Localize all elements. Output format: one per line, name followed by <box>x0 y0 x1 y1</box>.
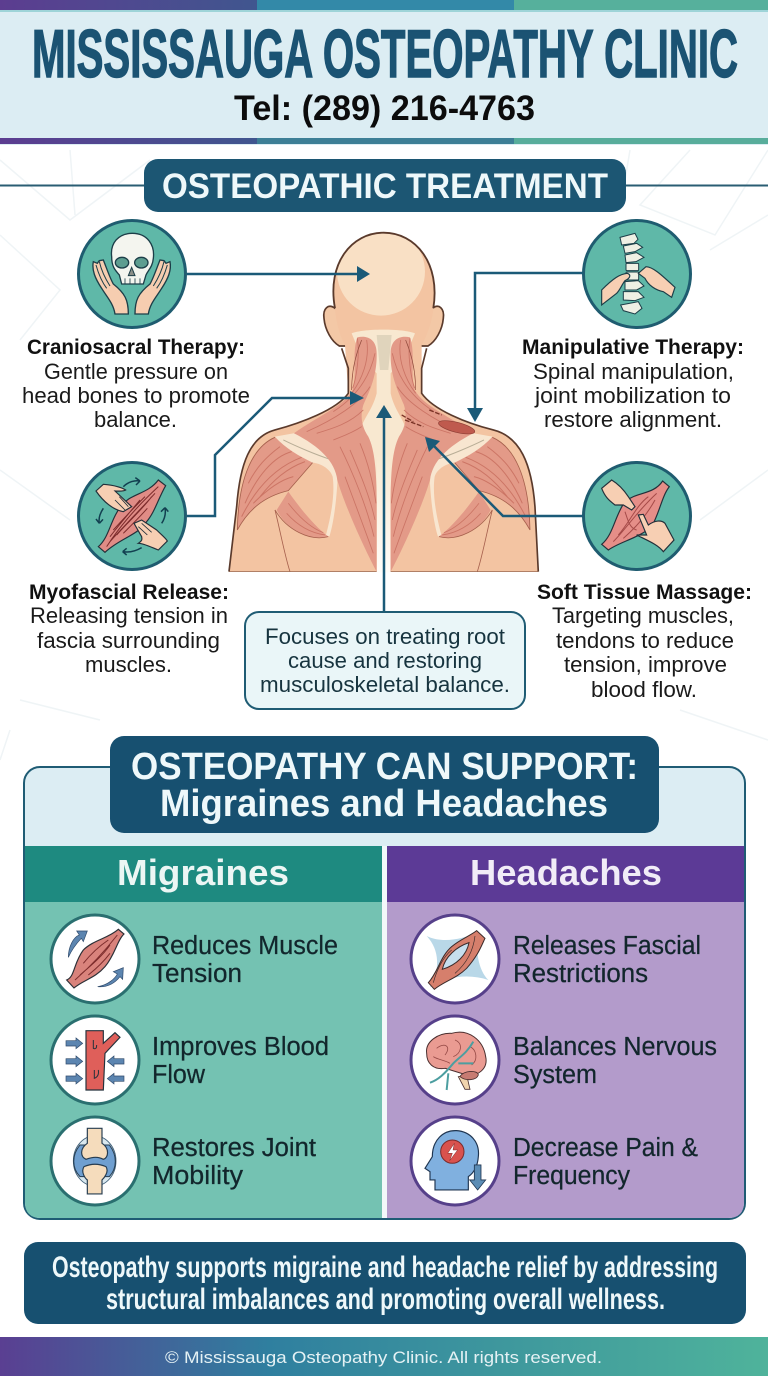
text block: soft tissue massage: blood flow. <box>591 677 697 702</box>
text block: soft tissue massage: tension, improve <box>564 652 727 677</box>
benefits text: migraines: Flow <box>152 1061 206 1089</box>
icon: manipulative therapy spine and hands <box>584 220 690 328</box>
icon: craniosacral skull held in hands <box>78 220 186 328</box>
benefits text: headaches: Frequency <box>513 1162 630 1190</box>
column: migraines: Migraines <box>117 852 289 893</box>
benefits text: migraines <box>152 932 338 1190</box>
connector arrow: soft tissue to trapezius <box>425 437 583 516</box>
section heading: osteopathic treatment <box>0 159 768 212</box>
column: migraines <box>25 846 382 1218</box>
text block: manipulative therapy: Manipulative Therapy: <box>522 335 744 359</box>
text block: myofascial release: Myofascial Release: <box>29 580 229 604</box>
section heading: osteopathy can support <box>110 736 659 833</box>
text block: myofascial release: Releasing tension in <box>30 603 228 628</box>
text block: myofascial release: fascia surrounding <box>37 628 220 653</box>
icon: myofascial release hands on muscle <box>78 462 186 570</box>
text block: manipulative therapy <box>522 335 744 432</box>
column: headaches <box>387 846 744 1218</box>
section heading: osteopathy can support: Migraines and Headaches <box>160 783 608 825</box>
callout: root cause <box>245 612 525 709</box>
callout: root cause: musculoskeletal balance. <box>260 672 510 697</box>
column: headaches: Headaches <box>470 852 662 893</box>
benefits text: migraines: Reduces Muscle <box>152 932 338 960</box>
text block: manipulative therapy: restore alignment. <box>544 407 722 432</box>
connector arrow: myofascial to neck <box>187 391 364 516</box>
text block: soft tissue massage: Targeting muscles, <box>552 603 734 628</box>
page background pattern <box>0 150 768 760</box>
text block: manipulative therapy: Spinal manipulation, <box>533 359 734 384</box>
panel: osteopathy can support <box>24 767 745 1219</box>
benefits text: migraines: Restores Joint <box>152 1134 316 1162</box>
text block: craniosacral therapy: balance. <box>94 407 177 432</box>
benefits text: headaches: Releases Fascial <box>513 932 701 960</box>
connector arrow: craniosacral to head <box>187 266 370 282</box>
header band <box>0 0 768 145</box>
text block: myofascial release: muscles. <box>85 652 172 677</box>
connector arrow: manipulative to shoulder <box>467 273 583 422</box>
icon: brain and nerves <box>411 1016 499 1104</box>
benefits text: headaches <box>513 932 717 1190</box>
benefits text: headaches: Balances Nervous <box>513 1033 717 1061</box>
telephone: Tel: (289) 216-4763 <box>234 89 535 128</box>
footer bar <box>0 1337 768 1376</box>
section heading: osteopathy can support: OSTEOPATHY CAN SUPPORT: <box>131 746 638 788</box>
text block: myofascial release <box>29 580 229 677</box>
connector arrow: callout to spine <box>376 405 392 612</box>
benefits text: headaches: Restrictions <box>513 960 648 988</box>
icon: joint <box>51 1117 139 1205</box>
icon: head with pain and down arrow <box>411 1117 499 1205</box>
summary banner <box>24 1242 746 1324</box>
benefits text: migraines: Tension <box>152 960 242 988</box>
footer bar: © Mississauga Osteopathy Clinic. All rights reserved. <box>165 1348 602 1367</box>
benefits text: migraines: Improves Blood <box>152 1033 329 1061</box>
icon: soft tissue massage <box>584 462 690 570</box>
text block: manipulative therapy: joint mobilization to <box>534 383 731 408</box>
text block: craniosacral therapy: Gentle pressure on <box>44 359 228 384</box>
text block: soft tissue massage: tendons to reduce <box>556 628 734 653</box>
text block: craniosacral therapy <box>22 335 250 432</box>
anatomy illustration: back of head, neck and shoulders <box>229 228 538 572</box>
text block: craniosacral therapy: head bones to promote <box>22 383 250 408</box>
text block: soft tissue massage: Soft Tissue Massage: <box>537 580 752 604</box>
benefits text: headaches: System <box>513 1061 597 1089</box>
callout: root cause: cause and restoring <box>288 648 482 673</box>
icon: muscle tension <box>51 915 139 1003</box>
callout: root cause: Focuses on treating root <box>265 624 506 649</box>
text block: soft tissue massage <box>537 580 752 702</box>
benefits text: migraines: Mobility <box>152 1162 243 1190</box>
icon: fascia <box>411 915 499 1003</box>
icon: blood flow <box>51 1016 139 1104</box>
section heading: osteopathic treatment: OSTEOPATHIC TREATMENT <box>162 167 608 206</box>
benefits text: headaches: Decrease Pain & <box>513 1134 698 1162</box>
text block: craniosacral therapy: Craniosacral Therapy: <box>27 335 245 359</box>
